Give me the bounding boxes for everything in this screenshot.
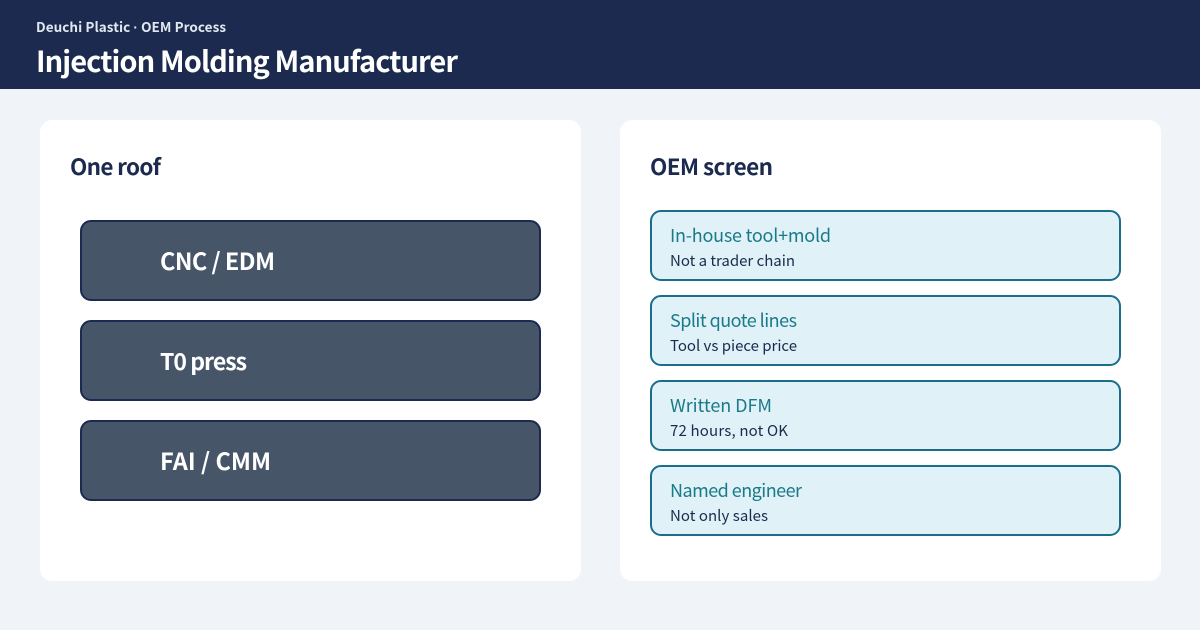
step: CNC / EDM: CNC / EDM xyxy=(160,243,275,277)
heading: one roof: One roof xyxy=(70,150,163,182)
check: split quote lines: Split quote lines xyxy=(670,307,797,333)
step: FAI / CMM xyxy=(81,421,540,500)
check: split quote lines: Tool vs piece price xyxy=(670,335,797,356)
check: in-house tool+mold: Not a trader chain xyxy=(670,250,795,271)
check: split quote lines xyxy=(651,296,1120,365)
check: in-house tool+mold xyxy=(651,211,1120,280)
step: FAI / CMM: FAI / CMM xyxy=(160,443,271,477)
header eyebrow: Deuchi Plastic · OEM Process xyxy=(36,16,226,36)
check: written DFM: Written DFM xyxy=(670,392,772,418)
header band xyxy=(0,0,1200,89)
step: T0 press xyxy=(81,321,540,400)
title: Injection Molding Manufacturer xyxy=(36,39,458,81)
check: written DFM: 72 hours, not OK xyxy=(670,420,788,441)
check: named engineer xyxy=(651,466,1120,535)
check: in-house tool+mold: In-house tool+mold xyxy=(670,222,831,248)
step: CNC / EDM xyxy=(81,221,540,300)
panel: one roof xyxy=(40,120,581,581)
check: named engineer: Not only sales xyxy=(670,505,768,526)
check: named engineer: Named engineer xyxy=(670,477,803,503)
panel: OEM screen xyxy=(620,120,1161,581)
heading: OEM screen: OEM screen xyxy=(650,150,773,182)
step: T0 press: T0 press xyxy=(160,343,247,377)
check: written DFM xyxy=(651,381,1120,450)
